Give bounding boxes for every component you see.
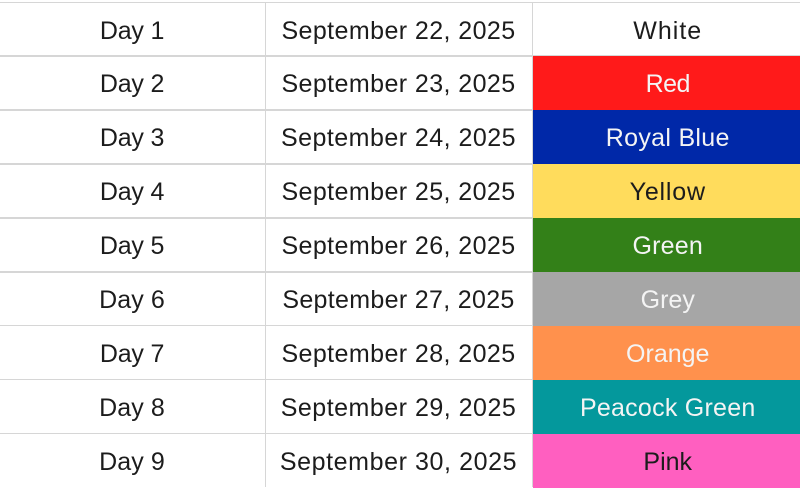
- row: day 1: [100, 17, 702, 45]
- row: day 5: Day 5: [100, 232, 164, 260]
- row: day 8: Peacock Green: [580, 394, 756, 422]
- row: day 2: Red: [646, 70, 690, 98]
- row: day 9: [99, 434, 800, 488]
- row: day 7: [100, 326, 800, 380]
- row: day 9: September 30, 2025: [280, 448, 517, 476]
- row: day 8: Day 8: [99, 394, 165, 422]
- row: day 8: September 29, 2025: [281, 394, 516, 422]
- row: day 4: [100, 164, 800, 218]
- row: day 1: White: [633, 17, 702, 45]
- row: day 4: Day 4: [100, 178, 164, 206]
- row: day 6: September 27, 2025: [282, 286, 515, 314]
- row: day 9: Pink: [643, 448, 692, 476]
- row: day 5: Green: [632, 232, 703, 260]
- row: day 7: September 28, 2025: [281, 340, 516, 368]
- row: day 2: Day 2: [100, 70, 164, 98]
- row: day 5: September 26, 2025: [281, 232, 516, 260]
- row: day 6: Day 6: [99, 286, 165, 314]
- row: day 4: September 25, 2025: [281, 178, 516, 206]
- row: day 2: [100, 56, 800, 110]
- row: day 1: Day 1: [100, 17, 164, 45]
- row: day 8: [99, 380, 800, 434]
- row: day 7: Orange: [626, 340, 709, 368]
- row: day 7: Day 7: [100, 340, 164, 368]
- row: day 4: Yellow: [630, 178, 706, 206]
- row: day 6: [99, 272, 800, 326]
- row: day 3: [100, 110, 800, 164]
- row: day 3: Royal Blue: [606, 124, 730, 152]
- row: day 3: Day 3: [100, 124, 164, 152]
- row: day 6: Grey: [641, 286, 695, 314]
- row: day 3: September 24, 2025: [281, 124, 516, 152]
- row: day 2: September 23, 2025: [281, 70, 516, 98]
- row: day 1: September 22, 2025: [281, 17, 516, 45]
- row: day 9: Day 9: [99, 448, 165, 476]
- row: day 5: [100, 218, 800, 272]
